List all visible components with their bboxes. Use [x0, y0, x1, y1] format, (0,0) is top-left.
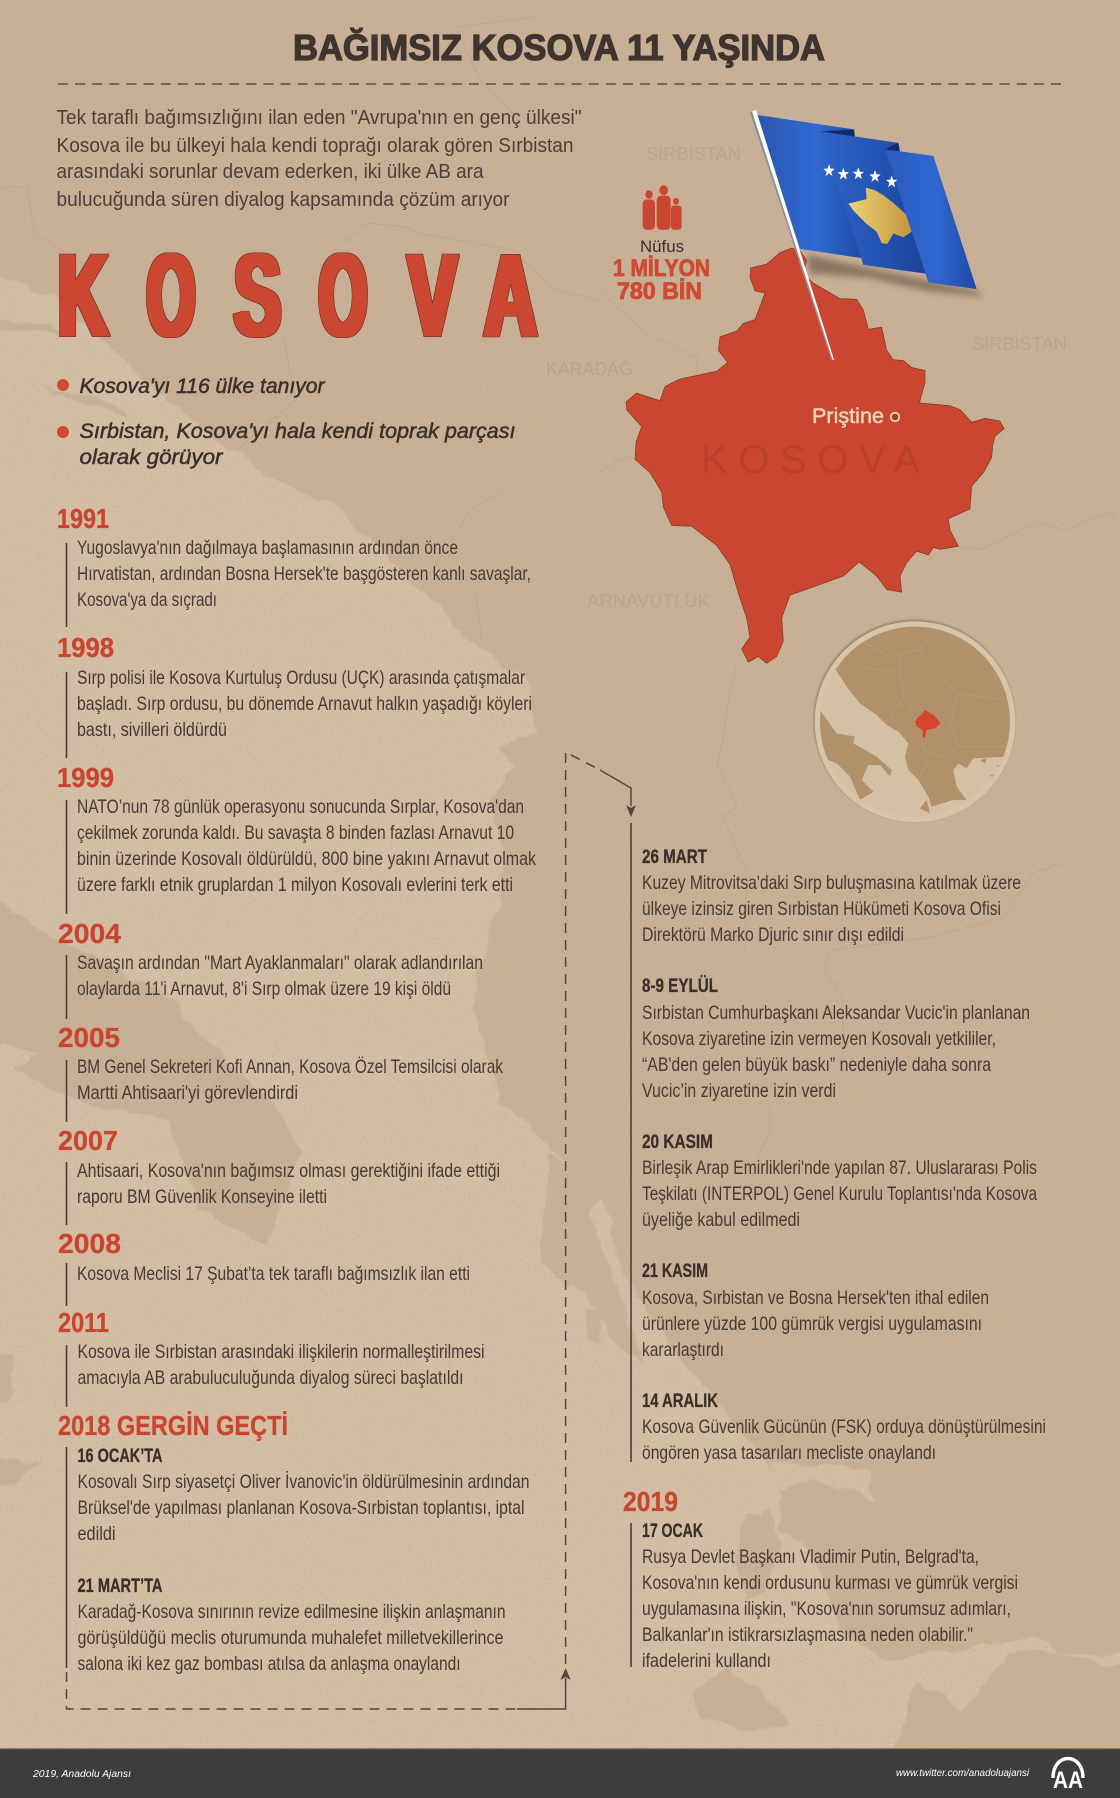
timeline: 2018: Brüksel'de yapılması planlanan Kosova-Sırbistan toplantısı, iptal	[78, 1497, 524, 1519]
timeline: 2018	[58, 1410, 530, 1675]
key facts bullets	[57, 374, 516, 469]
timeline: 2018: edildi	[78, 1523, 116, 1545]
event: 8-9 Eylul: Sırbistan Cumhurbaşkanı Aleksandar Vucic'in planlanan	[642, 1002, 1030, 1024]
timeline: 2007: 2007	[58, 1125, 118, 1156]
Kosovo territory	[626, 248, 1004, 663]
timeline: 2008	[58, 1228, 470, 1306]
timeline: 2019: ifadelerini kullandı	[642, 1650, 771, 1672]
timeline: 2019: Balkanlar'ın istikrarsızlaşmasına neden olabilir."	[642, 1624, 973, 1646]
flag shadow	[807, 255, 983, 297]
event: 14 Aralik: öngören yasa tasarıları mecliste onaylandı	[642, 1442, 936, 1464]
key facts bullets: Kosova'yı 116 ülke tanıyor	[80, 374, 325, 398]
timeline: 1999	[57, 762, 536, 914]
timeline: 2005	[58, 1022, 503, 1122]
event: 8-9 Eylul: Kosova ziyaretine izin vermeyen Kosovalı yetkililer,	[642, 1028, 996, 1050]
big heading: KOSOVA: K	[58, 230, 108, 362]
icon: Anadolu Agency logo	[1053, 1758, 1083, 1794]
intro text: arasındaki sorunlar devam ederken, iki ülke AB ara	[56, 161, 484, 183]
timeline: 2011	[58, 1307, 484, 1407]
big heading: KOSOVA: A	[484, 230, 537, 362]
timeline: 2008: Kosova Meclisi 17 Şubat’ta tek taraflı bağımsızlık ilan etti	[77, 1263, 470, 1285]
map label: Sirbistan east: SIRBİSTAN	[972, 333, 1067, 354]
big heading: KOSOVA: O	[147, 230, 195, 362]
timeline: 2019: 17 OCAK	[642, 1520, 703, 1542]
event: 21 Kasim	[642, 1260, 989, 1361]
timeline: 2008: 2008	[58, 1228, 121, 1259]
icon: Anadolu Agency logo: AA	[1053, 1767, 1083, 1794]
timeline: 1998: bastı, sivilleri öldürdü	[77, 719, 227, 741]
event: 14 Aralik	[642, 1390, 1046, 1464]
timeline: 2019: 2019	[623, 1486, 678, 1517]
timeline: 2007: raporu BM Güvenlik Konseyine iletti	[77, 1186, 327, 1208]
timeline: 2011: Kosova ile Sırbistan arasındaki ilişkilerin normalleştirilmesi	[78, 1341, 484, 1363]
timeline: 2005: BM Genel Sekreteri Kofi Annan, Kosova Özel Temsilcisi olarak	[77, 1056, 503, 1078]
timeline: 2004: olaylarda 11'i Arnavut, 8'i Sırp olmak üzere 19 kişi öldü	[77, 978, 451, 1000]
event: 20 Kasim: Birleşik Arap Emirlikleri'nde yapılan 87. Uluslararası Polis	[642, 1157, 1037, 1179]
key facts bullets: Sırbistan, Kosova'yı hala kendi toprak parçası	[80, 419, 516, 443]
population stat: 1 MİLYON	[613, 255, 710, 282]
population icon	[643, 185, 682, 230]
timeline: 2018: 16 OCAK’TA	[78, 1445, 162, 1467]
timeline: 2018: Karadağ-Kosova sınırının revize edilmesine ilişkin anlaşmanın	[78, 1601, 506, 1623]
population stat: Nüfus	[640, 237, 684, 256]
big heading: KOSOVA: V	[408, 230, 457, 362]
map label: Karadag: KARADAĞ	[546, 358, 633, 379]
intro text: Kosova ile bu ülkeyi hala kendi toprağı olarak gören Sırbistan	[56, 135, 574, 157]
population stat	[613, 237, 710, 305]
big heading: KOSOVA: S	[234, 230, 281, 362]
timeline: 1999: 1999	[57, 762, 114, 793]
flag map emblem	[848, 188, 912, 244]
timeline: 1991: Yugoslavya'nın dağılmaya başlamasının ardından önce	[77, 537, 458, 559]
timeline: 2011: 2011	[58, 1307, 109, 1338]
event: 20 Kasim	[642, 1131, 1037, 1231]
map label: Arnavutluk: ARNAVUTLUK	[587, 590, 711, 611]
timeline: 2007: Ahtisaari, Kosova'nın bağımsız olması gerektiğini ifade ettiği	[77, 1160, 500, 1182]
event: 8-9 Eylul	[642, 974, 1030, 1102]
key facts bullets: olarak görüyor	[80, 445, 223, 469]
event: 26 Mart	[642, 846, 1021, 946]
timeline: 1998	[57, 632, 532, 758]
event: 8-9 Eylul: “AB'den gelen büyük baskı” nedeniyle daha sonra	[642, 1054, 991, 1076]
timeline: 1991: Hırvatistan, ardından Bosna Hersek'te başgösteren kanlı savaşlar,	[77, 563, 531, 585]
timeline: 1991: 1991	[57, 503, 109, 534]
timeline: 2004: 2004	[58, 918, 121, 949]
footer credit: 2019, Anadolu Ajansı	[32, 1768, 131, 1780]
timeline: 1991	[57, 503, 531, 627]
timeline: 2007	[58, 1125, 500, 1225]
timeline: 2019: uygulamasına ilişkin, "Kosova'nın sorumsuz adımları,	[642, 1598, 1011, 1620]
event: 26 Mart: 26 MART	[642, 846, 707, 868]
timeline: 1999: üzere farklı etnik gruplardan 1 milyon Kosovalı evlerini terk etti	[77, 874, 513, 896]
event: 8-9 Eylul: 8-9 EYLÜL	[642, 974, 718, 997]
timeline: 2018: 2018 GERGİN GEÇTİ	[58, 1410, 288, 1441]
timeline: 1991: Kosova'ya da sıçradı	[77, 589, 217, 611]
timeline: 1998: başladı. Sırp ordusu, bu dönemde Arnavut halkın yaşadığı köyleri	[77, 693, 532, 715]
event: 14 Aralik: 14 ARALIK	[642, 1390, 718, 1412]
connector arrow between columns	[66, 752, 636, 1709]
event: 8-9 Eylul: Vucic’in ziyaretine izin verdi	[642, 1080, 836, 1102]
Kosovo map with flag	[626, 110, 1004, 663]
timeline: 2005: 2005	[58, 1022, 120, 1053]
timeline: 2004: Savaşın ardından "Mart Ayaklanmaları" olarak adlandırılan	[77, 952, 483, 974]
timeline: 2018: görüşüldüğü meclis oturumunda muhalefet milletvekillerince	[78, 1627, 504, 1649]
timeline: 2018: 21 MART’TA	[78, 1575, 162, 1597]
flag stars	[823, 164, 897, 187]
event: 26 Mart: ülkeye izinsiz giren Sırbistan Hükümeti Kosova Ofisi	[642, 898, 1001, 920]
intro text	[56, 107, 582, 211]
timeline: 1998: 1998	[57, 632, 114, 663]
timeline: 2019: Kosova'nın kendi ordusunu kurması ve gümrük vergisi	[642, 1572, 1018, 1594]
timeline: 1998: Sırp polisi ile Kosova Kurtuluş Ordusu (UÇK) arasında çatışmalar	[77, 667, 525, 689]
big heading: KOSOVA	[58, 230, 537, 362]
event: 20 Kasim: üyeliğe kabul edilmedi	[642, 1209, 800, 1231]
title: BAĞIMSIZ KOSOVA 11 YAŞINDA	[293, 27, 825, 68]
footer bar	[0, 1748, 1120, 1798]
intro text: bulucuğunda süren diyalog kapsamında çözüm arıyor	[56, 189, 510, 211]
timeline: 1999: binin üzerinde Kosovalı öldürüldü, 800 bine yakını Arnavut olmak	[77, 848, 536, 870]
event: 21 Kasim: ürünlere yüzde 100 gümrük vergisi uygulamasını	[642, 1313, 982, 1335]
timeline: 2011: amacıyla AB arabuluculuğunda diyalog süreci başlatıldı	[78, 1367, 464, 1389]
map label: Sirbistan north: SIRBİSTAN	[646, 143, 741, 164]
flag pole	[750, 110, 834, 360]
timeline: 2018: salona iki kez gaz bombası atılsa da anlaşma onaylandı	[78, 1653, 460, 1675]
intro text: Tek taraflı bağımsızlığını ilan eden "Avrupa'nın en genç ülkesi"	[56, 107, 582, 129]
flag of Kosovo	[757, 115, 977, 289]
event: 21 Kasim: kararlaştırdı	[642, 1339, 724, 1361]
map label: Pristine: Priştine	[812, 405, 884, 428]
Kosovo marker on globe	[915, 710, 941, 737]
event: 26 Mart: Direktörü Marko Djuric sınır dışı edildi	[642, 924, 904, 946]
timeline: 2018: Kosovalı Sırp siyasetçi Oliver İvanovic'in öldürülmesinin ardından	[78, 1470, 530, 1493]
timeline right: late 2018 events	[631, 823, 1046, 1464]
title divider	[58, 83, 1061, 85]
event: 20 Kasim: 20 KASIM	[642, 1131, 713, 1153]
population stat: 780 BİN	[617, 278, 702, 305]
locator globe	[813, 617, 1020, 827]
timeline: 1999: NATO’nun 78 günlük operasyonu sonucunda Sırplar, Kosova'dan	[77, 796, 524, 818]
event: 21 Kasim: Kosova, Sırbistan ve Bosna Hersek'ten ithal edilen	[642, 1287, 989, 1309]
timeline: 2005: Martti Ahtisaari'yi görevlendirdi	[77, 1082, 298, 1104]
footer link: www.twitter.com/anadoluajansi	[896, 1767, 1030, 1779]
event: 21 Kasim: 21 KASIM	[642, 1260, 708, 1282]
timeline: 2004	[58, 918, 483, 1019]
timeline: 2019: Rusya Devlet Başkanı Vladimir Putin, Belgrad'ta,	[642, 1546, 979, 1568]
big heading: KOSOVA: O	[319, 230, 367, 362]
timeline: 1999: çekilmek zorunda kaldı. Bu savaşta 8 binden fazlası Arnavut 10	[77, 822, 514, 844]
map label: Kosova: KOSOVA	[701, 438, 920, 482]
timeline: 2019	[623, 1486, 1018, 1672]
event: 26 Mart: Kuzey Mitrovitsa'daki Sırp buluşmasına katılmak üzere	[642, 872, 1021, 894]
